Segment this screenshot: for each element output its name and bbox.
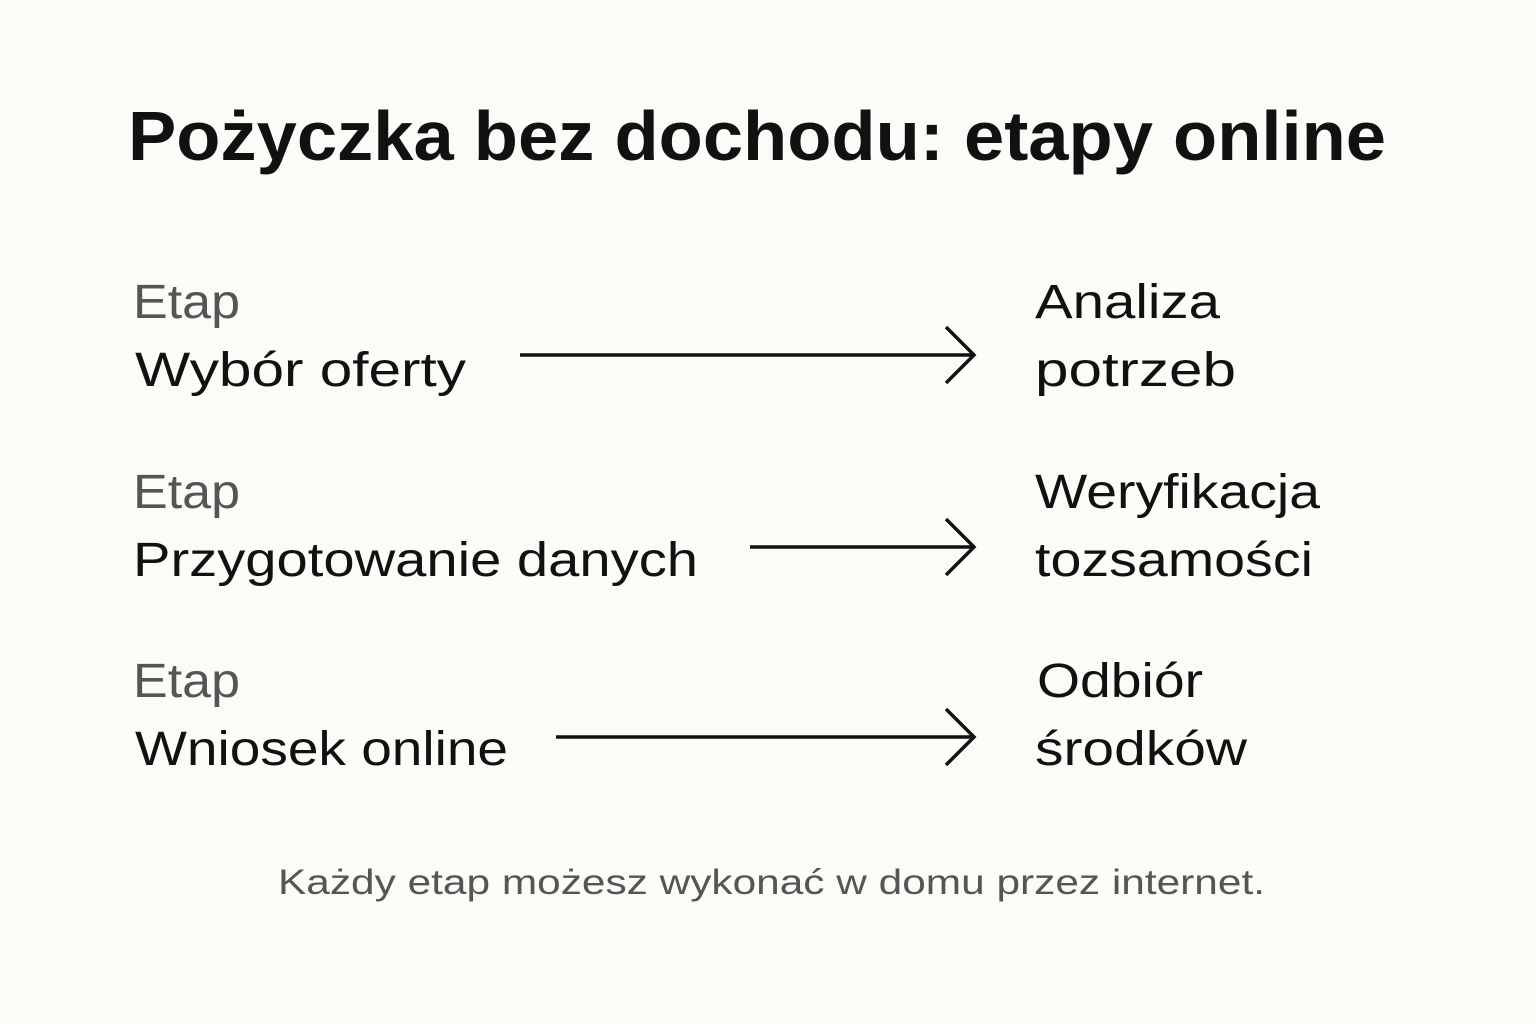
text: Weryfikacja tozsamości: tozsamości — [1035, 534, 1313, 587]
text: Wniosek online: Wniosek online — [135, 723, 508, 776]
label: etap 1: Etap — [133, 276, 240, 329]
text: Odbiór środków: Odbiór — [1037, 655, 1203, 708]
text: Analiza potrzeb: Analiza — [1035, 276, 1220, 329]
arrow 2 — [750, 519, 974, 575]
text: Przygotowanie danych: Przygotowanie danych — [133, 534, 698, 587]
footer note: Każdy etap możesz wykonać w domu przez internet. — [278, 863, 1265, 902]
text: Weryfikacja tozsamości — [1035, 466, 1320, 587]
text: Analiza potrzeb — [1035, 276, 1236, 397]
text: Weryfikacja tozsamości: Weryfikacja — [1035, 466, 1320, 519]
row 3: Wniosek online -> Odbiór środków — [133, 655, 1247, 776]
title: Pożyczka bez dochodu: etapy online — [128, 97, 1386, 175]
text: Wybór oferty: Wybór oferty — [135, 344, 466, 397]
label: etap 2: Etap — [133, 466, 240, 519]
text: Odbiór środków — [1035, 655, 1247, 776]
arrow 3 — [556, 709, 974, 765]
row 1: Wybór oferty -> Analiza potrzeb — [133, 276, 1236, 397]
label: etap 3: Etap — [133, 655, 240, 708]
text: Analiza potrzeb: potrzeb — [1035, 344, 1236, 397]
arrow 1 — [520, 327, 974, 383]
text: Odbiór środków: środków — [1035, 723, 1247, 776]
row 2: Przygotowanie danych -> Weryfikacja tozsamości — [133, 466, 1320, 587]
